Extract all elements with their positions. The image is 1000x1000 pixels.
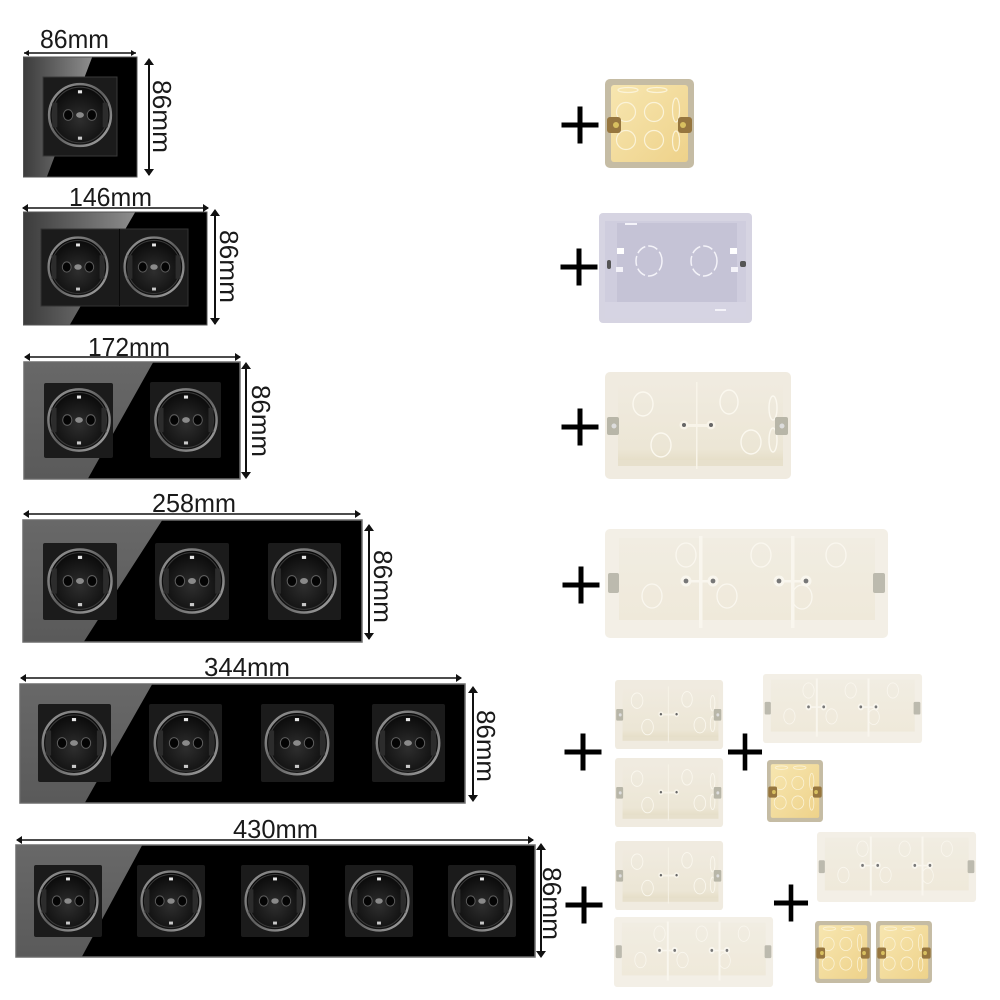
plus sign row 6 right [774,884,808,922]
dimension: width 344mm [20,652,462,682]
mounting box: cream double [605,372,791,479]
dimension: width 172mm [24,332,241,362]
dimension: width 258mm: 258mm [152,488,236,518]
plus sign row 2 [560,248,598,286]
dimension: height 86mm: 86mm [471,710,501,782]
plus sign row 5 right [728,734,762,770]
dimension: height 86mm: 86mm [537,867,567,940]
mounting box: yellow single right [876,921,932,983]
dimension: width 344mm: 344mm [204,652,290,682]
dimension: width 86mm: 86mm [40,24,109,54]
dimension: height 86mm [468,686,501,802]
mounting box: cream triple [763,674,922,743]
dimension: height 86mm [144,58,177,176]
mounting box: yellow single left [815,921,871,983]
dimension: height 86mm: 86mm [246,385,276,457]
panel: 430mm five sockets [16,845,535,957]
panel: 344mm four sockets [20,684,465,803]
dimension: width 258mm [23,488,361,518]
mounting box: yellow single [605,79,694,168]
dimension: height 86mm [241,362,276,479]
mounting box: cream double upper [615,680,723,749]
panel: 146mm double socket [24,212,207,325]
mounting box: cream triple [605,529,888,638]
dimension: height 86mm: 86mm [368,550,398,623]
plus sign row 1 [562,106,598,144]
dimension: height 86mm [210,209,244,325]
mounting box: grey double [599,213,752,323]
panel: 258mm three sockets [23,520,362,642]
dimension: height 86mm: 86mm [214,230,244,303]
mounting box: cream triple lower [614,917,773,987]
plus sign row 3 [562,408,598,446]
plus sign row 5 left [564,734,602,770]
dimension: width 430mm: 430mm [233,814,318,844]
plus sign row 4 [562,566,600,604]
mounting box: cream double lower [615,758,723,827]
plus sign row 6 left [566,886,602,924]
panel: 86mm single socket [24,57,137,177]
dimension: height 86mm: 86mm [147,80,177,153]
panel: 172mm two sockets [24,362,240,479]
mounting box: cream triple upper [817,832,976,902]
dimension: height 86mm [536,843,567,958]
dimension: width 172mm: 172mm [88,332,170,362]
mounting box: cream double [615,841,723,910]
dimension: width 86mm [24,24,136,56]
dimension: height 86mm [364,524,398,640]
dimension: width 146mm [22,182,209,212]
dimension: width 430mm [16,814,534,844]
mounting box: yellow single [767,760,823,822]
dimension: width 146mm: 146mm [69,182,152,212]
